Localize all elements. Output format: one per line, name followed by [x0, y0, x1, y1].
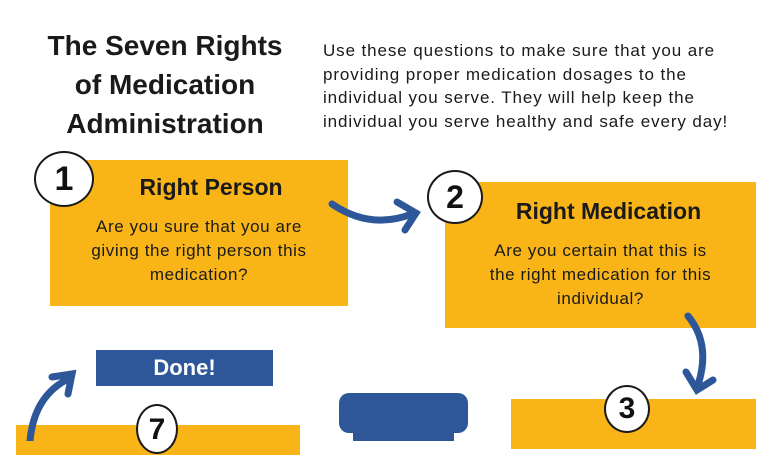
panel: step 2 right medication: the right medication for this [490, 265, 711, 284]
panel: step 3 [511, 399, 756, 449]
icon: number 3: 3 [619, 392, 635, 425]
icon: number 7 [136, 404, 178, 454]
icon: number 3 [604, 385, 650, 433]
panel: step 1 right person: Are you sure that you are [96, 217, 302, 236]
title: of Medication [75, 69, 255, 100]
panel: step 2 right medication [445, 182, 756, 328]
title: Administration [66, 108, 264, 139]
icon: number 2 [427, 170, 483, 224]
icon: number 7: 7 [149, 413, 165, 446]
panel: step 1 right person [50, 160, 348, 306]
title: The Seven Rights [48, 30, 282, 61]
done label [96, 350, 273, 386]
intro text [323, 41, 728, 130]
icon: pill bottle cap [339, 393, 468, 441]
arrow: 7 to done [30, 374, 72, 441]
done label: Done! [153, 355, 216, 380]
intro text: Use these questions to make sure that you are [323, 41, 715, 60]
panel: step 7 [16, 425, 300, 455]
intro text: providing proper medication dosages to the [323, 64, 687, 84]
intro text: individual you serve. They will help keep the [323, 88, 695, 107]
panel: step 2 right medication: individual? [557, 289, 644, 308]
intro text: individual you serve healthy and safe every day! [323, 112, 728, 130]
panel: step 2 right medication: Right Medication [516, 198, 701, 224]
arrow: 2 to 3 [686, 316, 713, 390]
icon: number 2: 2 [446, 179, 464, 215]
panel: step 1 right person: giving the right person this [91, 241, 307, 260]
icon: number 1: 1 [55, 160, 73, 198]
title [48, 30, 282, 139]
panel: step 1 right person: Right Person [139, 174, 283, 200]
panel: step 1 right person: medication? [150, 265, 248, 284]
arrow: 1 to 2 [332, 202, 416, 230]
icon: number 1 [34, 151, 94, 207]
panel: step 2 right medication: Are you certain that this is [494, 241, 707, 260]
